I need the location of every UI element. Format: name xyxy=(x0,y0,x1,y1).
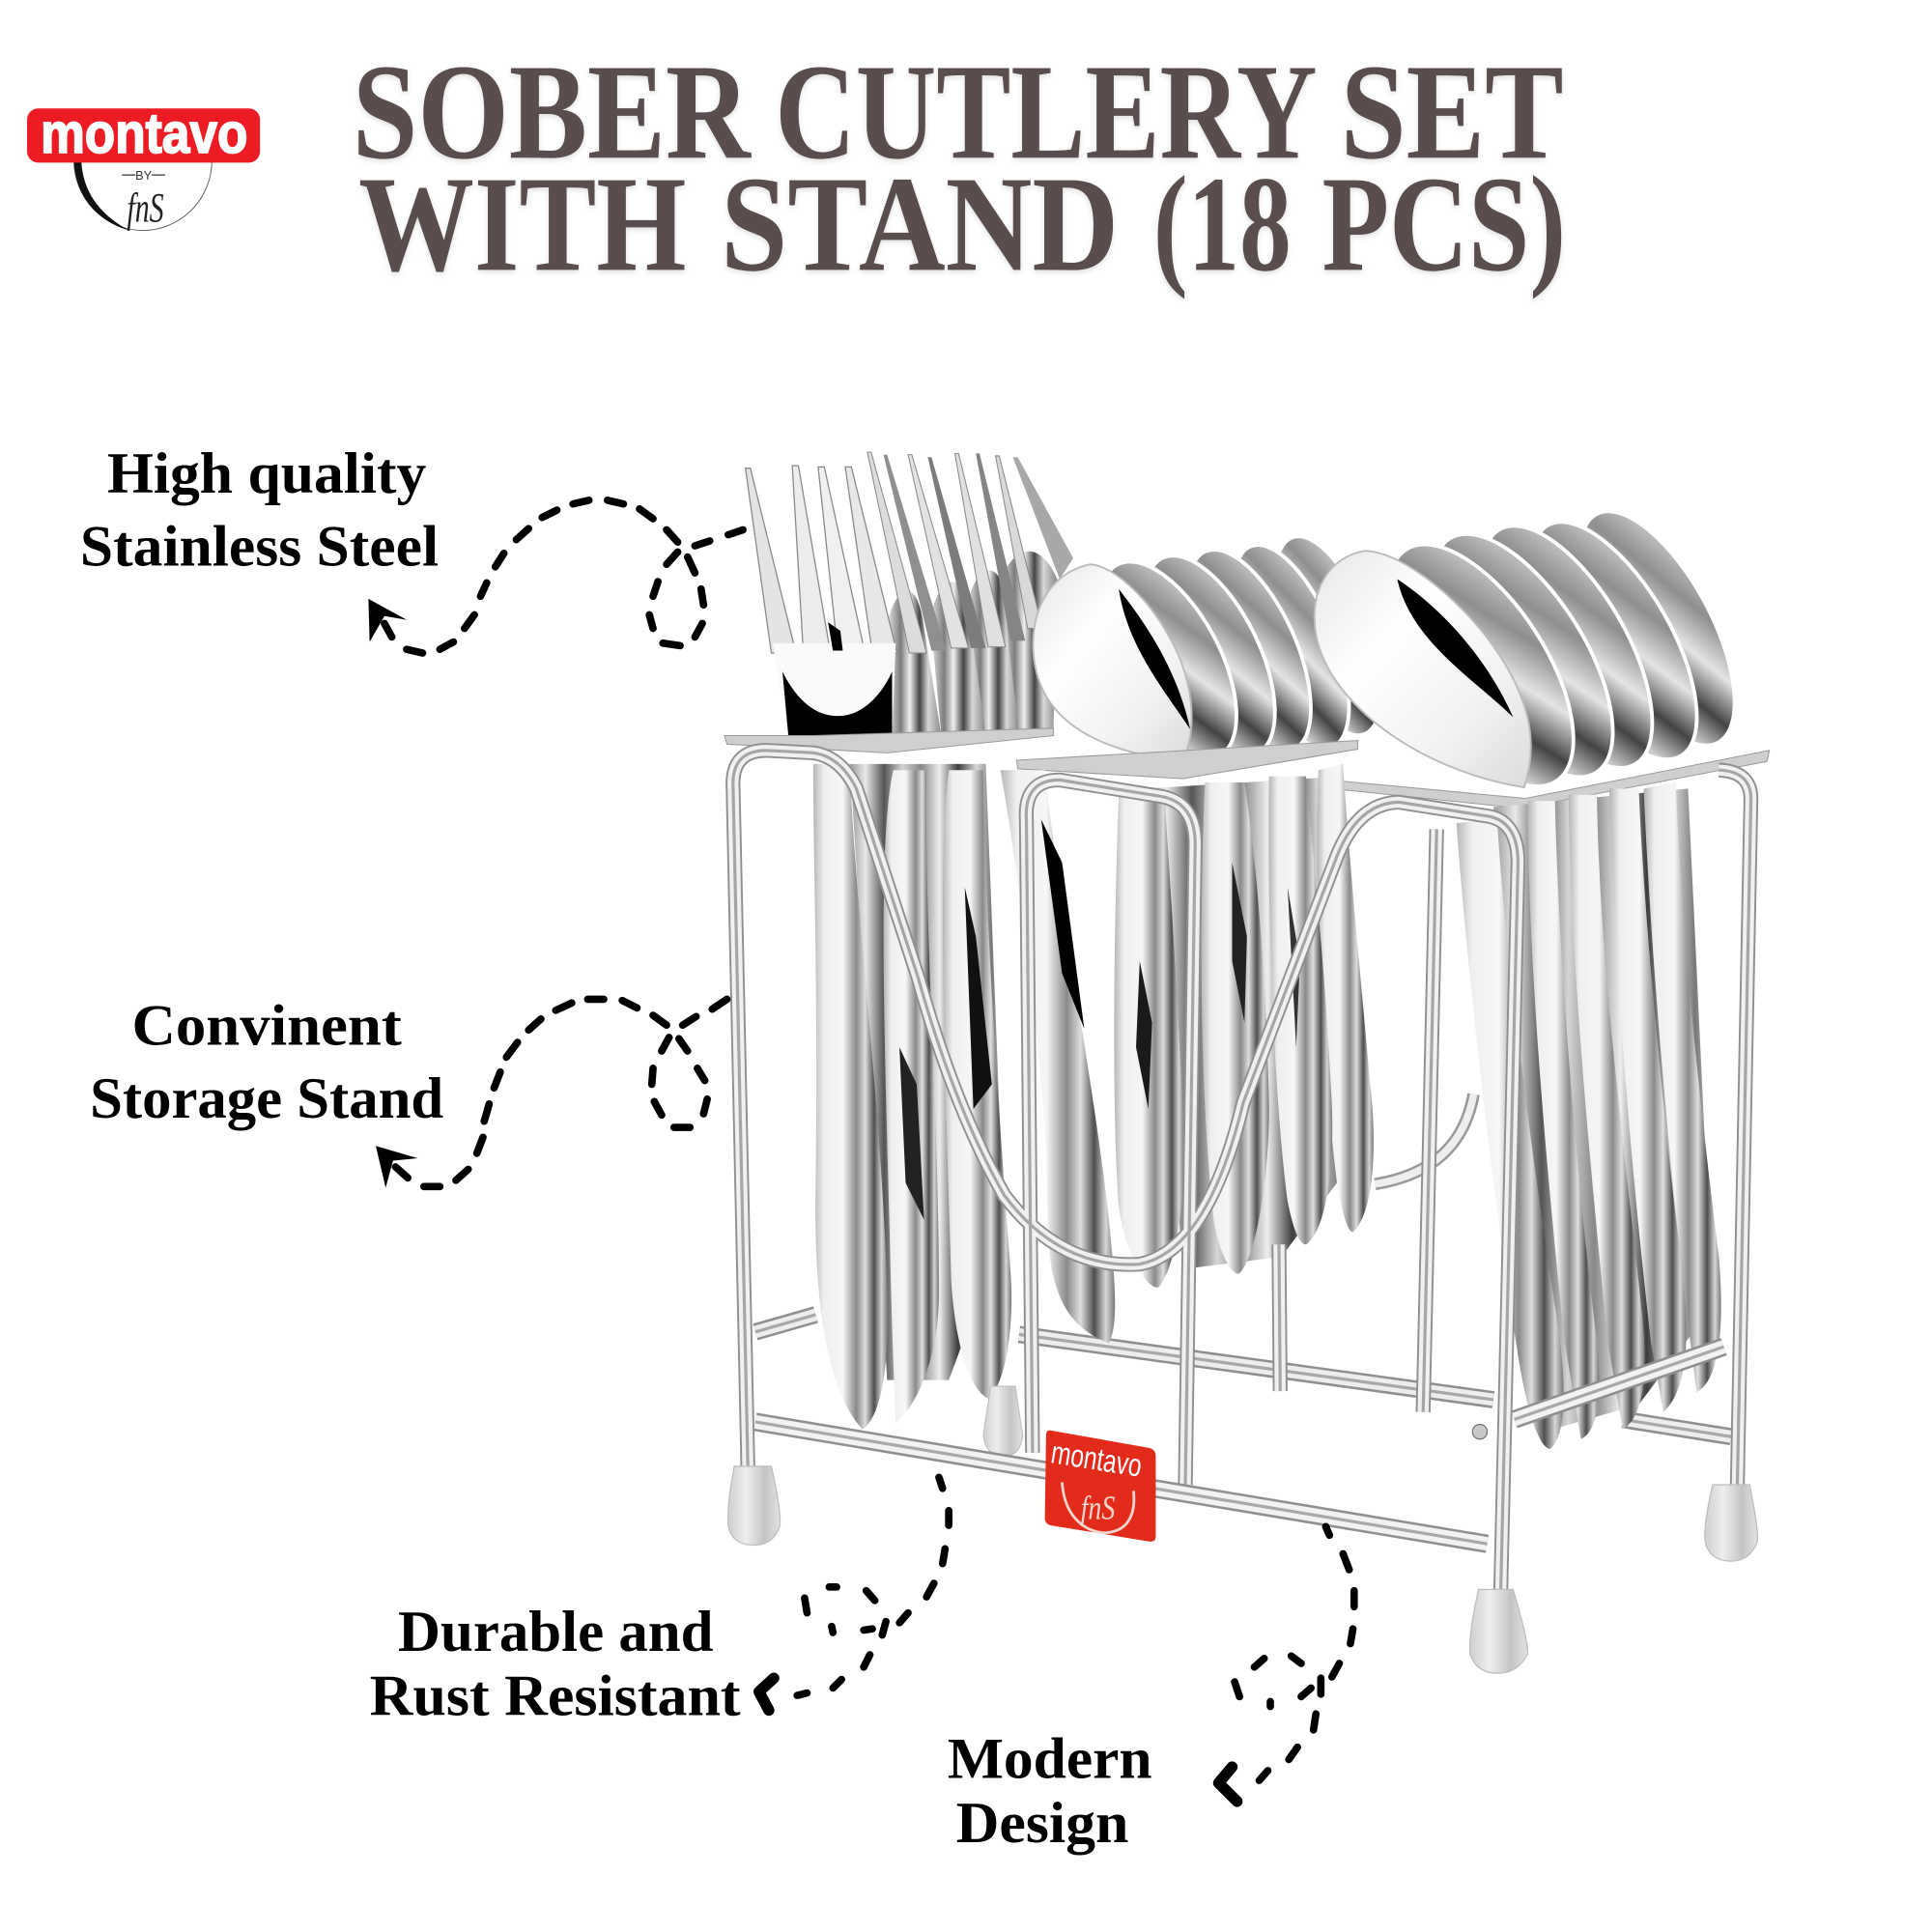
back spoons, left stack xyxy=(1071,523,1404,781)
label xyxy=(370,1600,741,1728)
rear left foot xyxy=(983,1386,1023,1457)
title line 1 xyxy=(353,36,1564,187)
title line 2: PCS) xyxy=(1322,148,1566,299)
logo: montavo by fnS xyxy=(27,102,260,232)
back spoons, right stack xyxy=(1352,489,1766,816)
dashed arrow xyxy=(368,500,743,653)
top plates xyxy=(724,728,1770,809)
label: Stainless Steel xyxy=(80,514,439,578)
logo by xyxy=(122,168,165,183)
right handles xyxy=(1457,782,1721,1449)
tag wordmark: montavo xyxy=(1048,1435,1144,1485)
logo circle xyxy=(74,160,212,231)
title xyxy=(353,36,1566,299)
dashed arrow xyxy=(1218,1526,1354,1802)
left handles xyxy=(813,764,1115,1430)
callout: convenient storage stand xyxy=(90,994,727,1188)
front spoon, left xyxy=(1033,564,1192,761)
title line 1: SET xyxy=(1341,36,1564,187)
title line 2: (18 xyxy=(1153,148,1292,299)
rivet ball xyxy=(1472,1424,1488,1439)
callout: high quality stainless steel xyxy=(80,441,743,653)
label: Storage Stand xyxy=(90,1066,443,1130)
fork tines xyxy=(867,452,1073,653)
tag emblem: fnS xyxy=(1081,1491,1115,1527)
back forks xyxy=(867,452,1073,735)
logo red badge xyxy=(27,108,260,162)
label xyxy=(80,441,439,578)
title line 2: STAND xyxy=(721,148,1119,299)
logo by: BY xyxy=(135,168,153,183)
label: Durable and xyxy=(398,1600,714,1663)
callout: durable and rust resistant xyxy=(370,1477,949,1728)
fork bodies xyxy=(887,590,941,735)
front spoon, right xyxy=(1315,551,1531,787)
middle handles xyxy=(1114,764,1374,1288)
logo wordmark: montavo xyxy=(41,102,247,165)
feet xyxy=(728,1466,1757,1673)
rear rails and posts xyxy=(755,1094,1731,1436)
title line 2 xyxy=(358,148,1566,299)
red brand tag xyxy=(1045,1431,1155,1542)
stand wire frame and V handle xyxy=(733,751,1751,1591)
front fork xyxy=(746,466,897,738)
label: Modern xyxy=(948,1727,1152,1791)
label: High quality xyxy=(107,441,426,505)
cutlery backing shadows xyxy=(850,764,1713,1430)
label xyxy=(90,994,443,1130)
label: Rust Resistant xyxy=(370,1664,741,1728)
front base rails xyxy=(755,1347,1723,1544)
dashed arrow xyxy=(759,1477,949,1710)
label: Convinent xyxy=(131,994,402,1058)
logo fnS: fnS xyxy=(127,185,164,232)
title line 2: WITH xyxy=(358,148,686,299)
label: Design xyxy=(956,1791,1128,1855)
dashed arrow xyxy=(376,999,727,1188)
title line 1: CUTLERY xyxy=(775,36,1318,187)
callout: modern design xyxy=(948,1526,1354,1855)
product photo: cutlery in stand xyxy=(724,452,1770,1673)
label xyxy=(948,1727,1152,1855)
title line 1: SOBER xyxy=(353,36,752,187)
